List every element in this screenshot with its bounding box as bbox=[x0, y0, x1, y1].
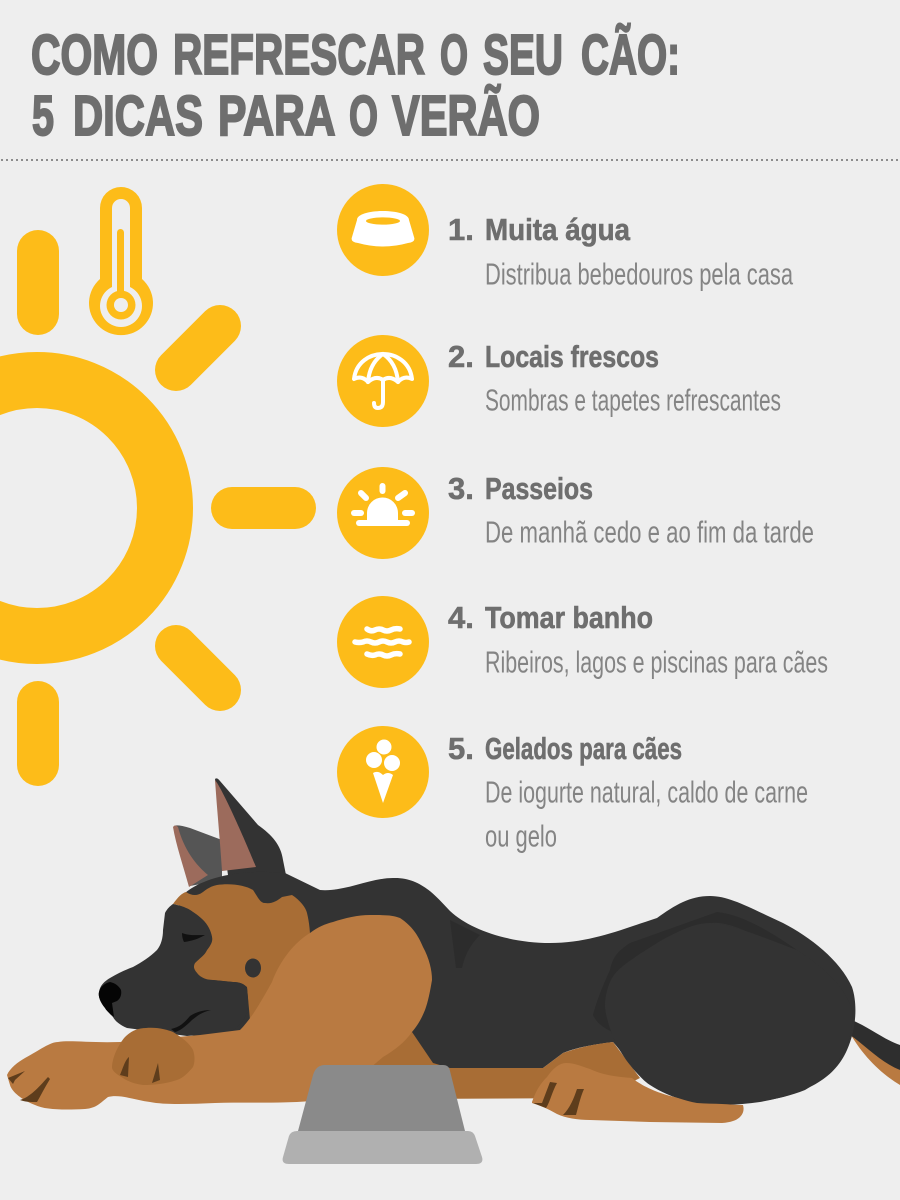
tip 4: bathing bbox=[337, 596, 828, 688]
tip 1 heading: Muita água bbox=[485, 212, 631, 247]
title: O bbox=[349, 84, 378, 147]
title bbox=[31, 23, 680, 147]
title: COMO bbox=[31, 23, 158, 86]
tip 4 heading: 4. bbox=[448, 600, 474, 635]
tip 5 heading: Gelados para cães bbox=[485, 731, 682, 766]
tip 3 heading: 3. bbox=[448, 471, 474, 506]
hind foot bbox=[532, 1063, 744, 1123]
tip 5 description: ou gelo bbox=[485, 818, 557, 854]
icon: thermometer bbox=[89, 187, 153, 335]
tip 1: water bbox=[337, 184, 794, 292]
far ear bbox=[173, 825, 222, 887]
title: REFRESCAR bbox=[173, 23, 425, 86]
tip 5: frozen treats bbox=[337, 726, 808, 854]
title: CÃO: bbox=[581, 23, 680, 86]
title: 5 bbox=[32, 84, 54, 147]
tip 2 heading: Locais frescos bbox=[485, 339, 659, 374]
icon: sunrise bbox=[337, 467, 429, 559]
illustration: sleeping dog bbox=[7, 778, 900, 1164]
tip 1 heading: 1. bbox=[448, 212, 474, 247]
title: O bbox=[440, 23, 468, 86]
icon: sun bbox=[0, 251, 295, 765]
title: VERÃO bbox=[392, 84, 540, 147]
tip 3 heading: Passeios bbox=[485, 471, 593, 506]
tip 2: shade bbox=[337, 335, 781, 427]
front paw toes bbox=[8, 1071, 50, 1102]
tip 3: walks bbox=[337, 467, 814, 559]
body shading bbox=[450, 912, 797, 1032]
icon: water waves bbox=[337, 596, 429, 688]
dog tail bbox=[848, 1020, 900, 1085]
food bowl bbox=[283, 1065, 482, 1164]
tip 2 heading: 2. bbox=[448, 339, 474, 374]
icon: umbrella bbox=[337, 335, 429, 427]
near ear bbox=[215, 778, 300, 890]
dog body bbox=[172, 872, 855, 1105]
dog face and muzzle bbox=[99, 904, 261, 1036]
title: PARA bbox=[218, 84, 335, 147]
lower belly bbox=[370, 1032, 640, 1099]
tip 5 heading: 5. bbox=[448, 731, 474, 766]
tip 4 heading: Tomar banho bbox=[485, 600, 653, 635]
title: SEU bbox=[483, 23, 563, 86]
dog shoulder and front leg bbox=[7, 915, 432, 1110]
dog haunch bbox=[605, 923, 852, 1104]
resting paw bbox=[112, 1028, 194, 1085]
title: DICAS bbox=[73, 84, 203, 147]
dog head patch bbox=[173, 884, 310, 1020]
icon: ice cream bbox=[337, 726, 429, 818]
icon: water bowl bbox=[337, 184, 429, 276]
